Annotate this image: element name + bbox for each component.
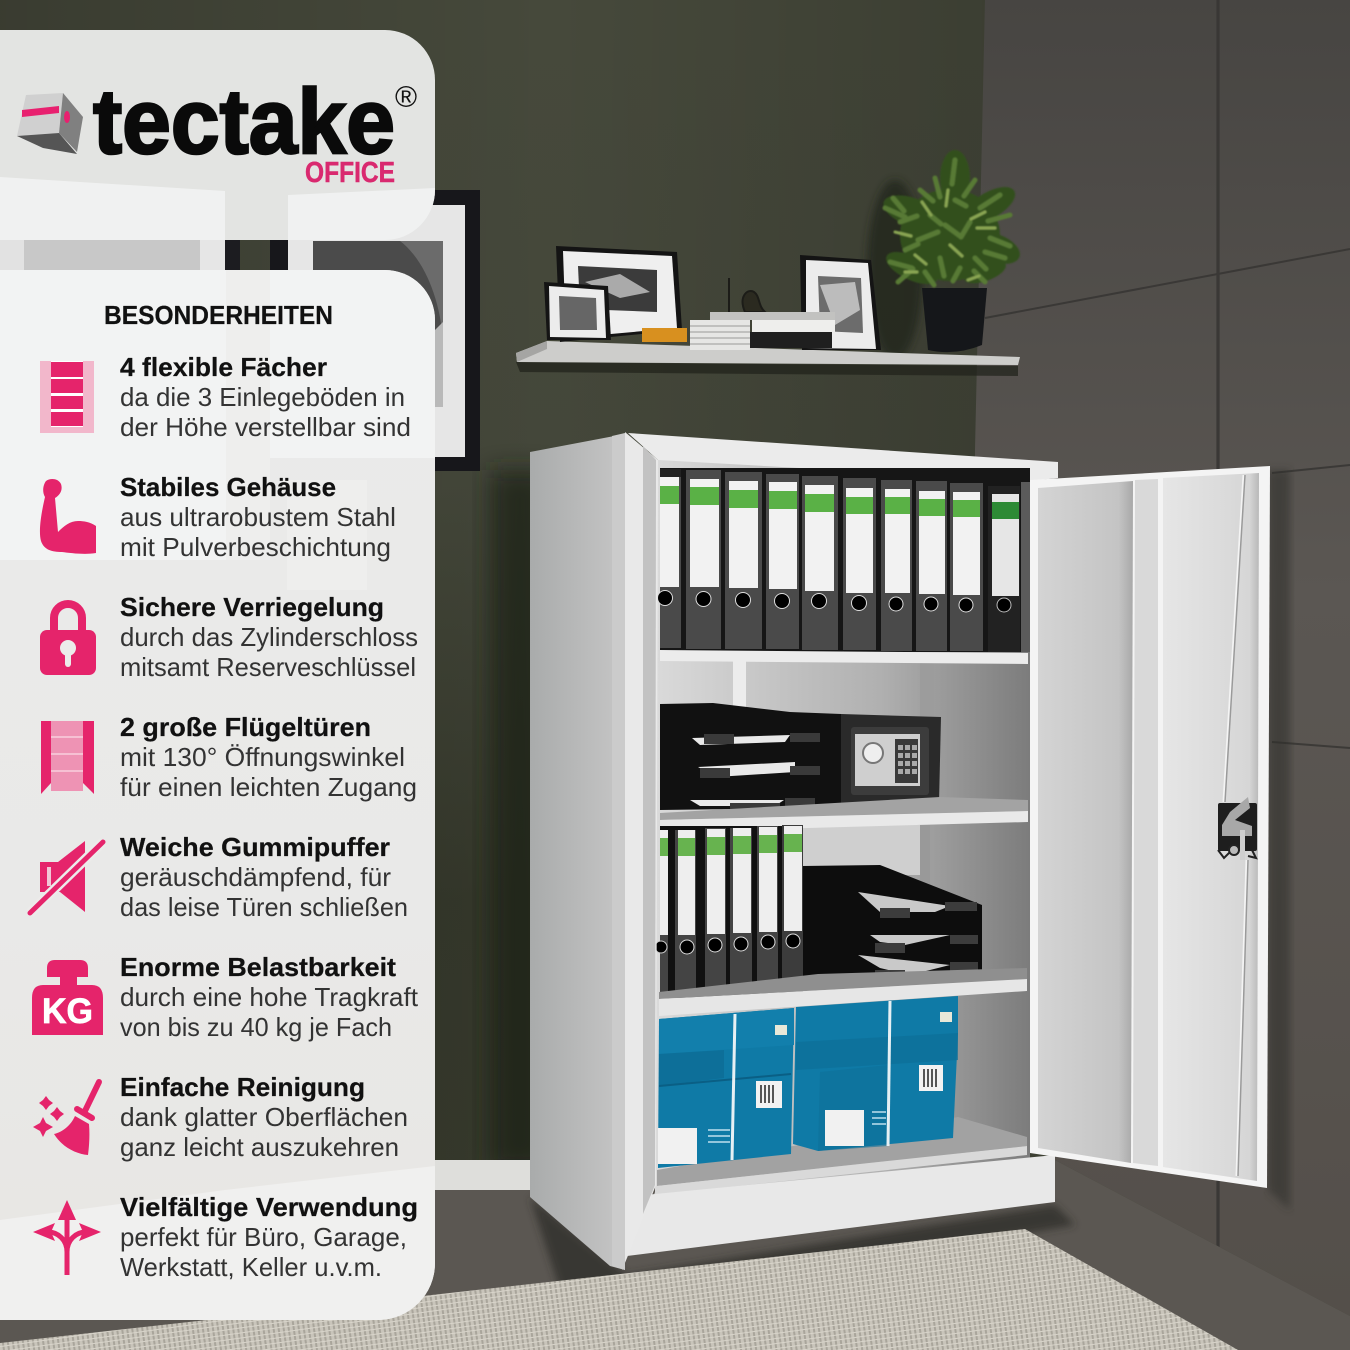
wall picture frame	[270, 190, 480, 471]
feature: Enorme Belastbarkeit: durch eine hohe Tragkraft	[120, 982, 419, 1012]
feature: 2 große Flügeltüren	[41, 712, 417, 802]
feature: Vielfältige Verwendung: perfekt für Büro, Garage,	[120, 1222, 407, 1252]
feature: Enorme Belastbarkeit: von bis zu 40 kg je Fach	[120, 1012, 392, 1042]
feature: Stabiles Gehäuse: aus ultrarobustem Stahl	[120, 502, 396, 532]
icon: kg weight	[32, 960, 103, 1035]
feature: Enorme Belastbarkeit	[32, 952, 419, 1042]
small picture frame	[544, 282, 611, 340]
feature: Weiche Gummipuffer: das leise Türen schließen	[120, 892, 408, 922]
feature: Einfache Reinigung: dank glatter Oberflächen	[120, 1102, 408, 1132]
shelf 3	[659, 968, 1027, 1016]
paper box left	[658, 1008, 794, 1168]
feature: Vielfältige Verwendung: Vielfältige Verwendung	[120, 1192, 418, 1222]
yellow box	[642, 328, 687, 342]
icon: kg weight: KG	[42, 992, 93, 1031]
panel: features	[0, 270, 435, 1320]
sub brand: OFFICE	[305, 157, 395, 189]
feature: Stabiles Gehäuse: Stabiles Gehäuse	[120, 472, 336, 502]
feature: Sichere Verriegelung: Sichere Verriegelung	[120, 592, 384, 622]
feature: 4 flexible Fächer: 4 flexible Fächer	[120, 352, 327, 382]
paper box right	[793, 996, 958, 1151]
icon: padlock	[40, 604, 96, 675]
shelf decor: frames, books, plant	[516, 150, 1024, 376]
upright rails	[733, 660, 934, 885]
brand name: tectake	[93, 71, 395, 173]
wall shelf	[516, 341, 1020, 376]
safe	[841, 714, 941, 805]
feature: Einfache Reinigung: ganz leicht auszukehren	[120, 1132, 399, 1162]
feature: 4 flexible Fächer	[40, 352, 411, 442]
filing cabinet	[530, 432, 1270, 1270]
icon: open doors	[41, 721, 94, 794]
background: concrete wall	[975, 0, 1350, 1316]
feature: Einfache Reinigung	[33, 1072, 408, 1162]
feature: Stabiles Gehäuse	[40, 472, 396, 562]
feature: Weiche Gummipuffer: geräuschdämpfend, für	[120, 862, 391, 892]
icon: broom with sparkles	[33, 1082, 99, 1155]
feature: Vielfältige Verwendung: Werkstatt, Keller u.v.m.	[120, 1252, 382, 1282]
large picture frame	[556, 246, 682, 342]
icon: flexed arm	[40, 479, 96, 554]
floor	[0, 1160, 1350, 1350]
lighter background reflections	[0, 270, 435, 1320]
skirting board	[430, 1160, 530, 1190]
rug	[0, 1229, 1238, 1350]
letter trays row 2	[660, 703, 841, 810]
feature: Enorme Belastbarkeit: Enorme Belastbarkeit	[120, 952, 396, 982]
lighter background reflections	[0, 177, 435, 240]
plant pot	[922, 288, 987, 352]
icon: tectake cube logo	[17, 93, 83, 154]
feature: 4 flexible Fächer: da die 3 Einlegeböden in	[120, 382, 405, 412]
door lock	[1218, 797, 1257, 860]
panel: logo	[0, 30, 435, 240]
plant shadow on wall	[867, 180, 923, 360]
feature: Sichere Verriegelung	[40, 592, 418, 682]
feature: Stabiles Gehäuse: mit Pulverbeschichtung	[120, 532, 391, 562]
cabinet side panel	[530, 434, 625, 1270]
feature: 2 große Flügeltüren: für einen leichten Zugang	[120, 772, 417, 802]
left open door	[612, 432, 658, 1270]
feature: Vielfältige Verwendung	[33, 1192, 418, 1282]
feature: 2 große Flügeltüren: 2 große Flügeltüren	[120, 712, 371, 742]
binders row 3	[655, 825, 803, 998]
registered mark: ®	[395, 81, 417, 114]
feature: Sichere Verriegelung: mitsamt Reserveschlüssel	[120, 652, 416, 682]
shelf 1	[660, 650, 1028, 664]
binders row 1	[658, 468, 1030, 652]
book stacks	[690, 312, 835, 350]
feature: Weiche Gummipuffer: Weiche Gummipuffer	[120, 832, 390, 862]
letter trays row 3	[803, 865, 982, 985]
feature: 2 große Flügeltüren: mit 130° Öffnungswinkel	[120, 742, 405, 772]
feature: Weiche Gummipuffer	[30, 832, 408, 922]
plant foliage	[879, 150, 1024, 291]
icon: shelves	[40, 361, 94, 433]
right picture frame	[800, 255, 881, 350]
feature: Sichere Verriegelung: durch das Zylinderschloss	[120, 622, 418, 652]
shelf 2	[660, 797, 1028, 832]
background: olive wall	[0, 0, 1000, 1200]
feature: 4 flexible Fächer: der Höhe verstellbar sind	[120, 412, 411, 442]
heading: BESONDERHEITEN	[104, 300, 333, 330]
cabinet top bar	[628, 433, 1058, 481]
cabinet plinth	[627, 1146, 1055, 1256]
cabinet bottom floor	[657, 1117, 1027, 1186]
icon: branching arrows	[33, 1200, 101, 1275]
small figurine	[729, 278, 765, 312]
cabinet floor shadow	[530, 1197, 1075, 1290]
right open door	[1030, 466, 1270, 1188]
blurred background frames visible between panels	[0, 170, 240, 270]
icon: muted speaker	[30, 841, 103, 913]
feature: Einfache Reinigung: Einfache Reinigung	[120, 1072, 365, 1102]
cabinet interior back	[655, 460, 1030, 1195]
